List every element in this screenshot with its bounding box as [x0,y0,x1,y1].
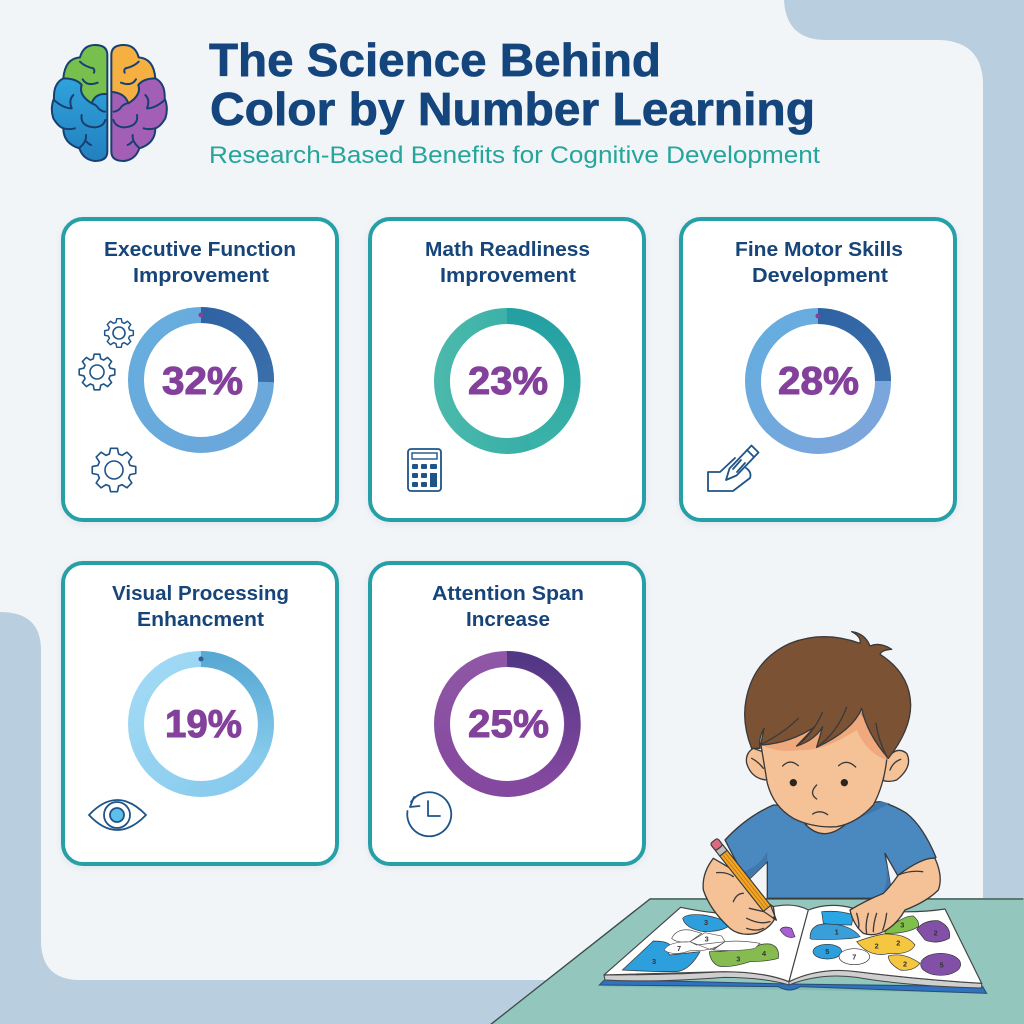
face [761,707,887,827]
heading: math readiness [425,239,590,287]
numbers: 3 [652,957,656,966]
right arm [850,858,940,935]
numbers: 5 [825,947,829,956]
panel: fine motor skills [681,219,955,520]
ears [746,748,767,780]
numbers: 7 [677,944,681,953]
colour regions left page [683,915,730,932]
icon: eye [89,800,146,830]
numbers: 2 [875,942,879,951]
table [490,898,1024,1024]
numbers: 7 [852,952,856,961]
numbers: 3 [736,955,740,964]
heading: executive function: Improvement [133,265,269,287]
numbers: 2 [896,938,900,947]
donut chart: 25% [442,659,573,789]
hand details [717,871,923,933]
heading: attention span: Attention Span [432,583,584,605]
heading: visual processing [112,583,289,631]
heading: executive function [104,239,296,287]
donut chart: 32% [136,312,266,445]
numbers: 4 [762,949,767,958]
heading: math readiness: Improvement [440,265,576,287]
panel: visual processing [63,563,337,864]
numbers: 5 [940,960,944,969]
panel: attention span [370,563,644,864]
numbers: 2 [934,929,938,938]
donut chart: 23% [442,316,573,446]
book [599,905,987,993]
donut chart: 32%: 32% [162,360,243,403]
heading: attention span [432,583,584,631]
heading: visual processing: Enhancment [137,609,264,631]
left arm [703,858,775,934]
table edge [490,899,1023,1024]
panel: math readiness [370,219,644,520]
heading: fine motor skills [735,239,903,287]
icon: hand with pencil [708,446,758,491]
numbers [652,918,944,969]
hair [745,632,911,758]
donut chart: 25%: 25% [468,703,549,746]
heading: math readiness: Math Readliness [425,239,590,261]
donut chart: 28% [753,314,883,446]
title: Color by Number Learning [210,83,815,135]
donut chart: 19% [136,656,266,789]
icon: brain [52,45,167,161]
eyes and mouth [783,762,856,815]
pencil [710,838,780,923]
neck [805,824,846,834]
title: The Science Behind [209,34,661,86]
donut chart: 23%: 23% [468,360,548,403]
colour regions right page [822,911,853,925]
subtitle: Research-Based Benefits for Cognitive Development [209,142,820,169]
donut chart: 19%: 19% [165,703,242,746]
illustration: boy colouring [490,632,1024,1024]
heading: executive function: Executive Function [104,239,296,261]
panel: executive function [63,219,337,520]
heading: fine motor skills: Development [752,265,888,287]
heading: fine motor skills: Fine Motor Skills [735,239,903,261]
heading: attention span: Increase [466,609,550,631]
numbers: 3 [900,921,904,930]
icon: calculator [408,449,441,491]
title [209,34,815,135]
numbers: 3 [705,935,709,944]
hair shadow [762,708,888,760]
icon: clock [407,792,451,836]
shirt [725,632,936,898]
numbers: 2 [903,960,907,969]
numbers: 1 [835,928,839,937]
icon: gears [79,319,136,492]
heading: visual processing: Visual Processing [112,583,289,605]
numbers: 3 [704,918,708,927]
donut chart: 28%: 28% [778,360,859,403]
